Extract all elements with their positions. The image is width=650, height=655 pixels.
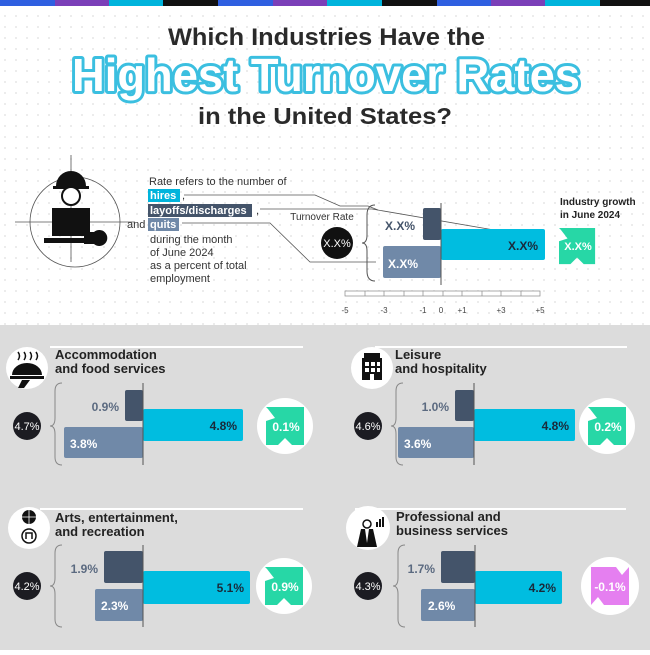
panel: arts, entertainment, and recreation: 5.1% bbox=[217, 581, 244, 595]
panel: professional and business services: 1.7% bbox=[408, 562, 435, 576]
axis ruler: +3 bbox=[496, 306, 506, 315]
legend text: hires bbox=[150, 190, 176, 202]
legend text: layoffs/discharges bbox=[150, 205, 247, 217]
panel: arts, entertainment, and recreation: 1.9% bbox=[71, 562, 98, 576]
title: Which Industries Have the bbox=[168, 24, 485, 51]
legend text: employment bbox=[150, 273, 210, 285]
panel: accommodation and food services: 0.1% bbox=[272, 420, 300, 434]
legend chart: X.X% bbox=[323, 238, 351, 250]
panel: arts, entertainment, and recreation: 0.9% bbox=[271, 580, 299, 594]
panel: accommodation and food services: Accommodation bbox=[55, 347, 157, 362]
legend chart bbox=[290, 197, 636, 285]
legend text: , bbox=[256, 205, 259, 217]
panel: accommodation and food services: 0.9% bbox=[92, 400, 119, 414]
legend icon: worker bbox=[15, 155, 135, 267]
panel: leisure and hospitality: 1.0% bbox=[422, 400, 449, 414]
panel: arts, entertainment, and recreation: and recreation bbox=[55, 524, 145, 539]
panel: leisure and hospitality bbox=[351, 347, 635, 465]
panel: arts, entertainment, and recreation: 2.3% bbox=[101, 599, 129, 613]
legend chart: X.X% bbox=[388, 257, 418, 271]
legend text: of June 2024 bbox=[150, 247, 214, 259]
panel: accommodation and food services: 4.8% bbox=[210, 419, 237, 433]
panel: leisure and hospitality: 0.2% bbox=[594, 420, 622, 434]
legend text: and bbox=[127, 219, 145, 231]
legend text: quits bbox=[150, 219, 176, 231]
panel: leisure and hospitality: 4.6% bbox=[355, 421, 381, 433]
panel: arts, entertainment, and recreation: Arts, entertainment, bbox=[55, 510, 178, 525]
panel: accommodation and food services: and food services bbox=[55, 361, 166, 376]
panel: accommodation and food services: 4.7% bbox=[14, 421, 40, 433]
axis ruler: -5 bbox=[341, 306, 349, 315]
panel: professional and business services: Professional and bbox=[396, 509, 501, 524]
legend chart: Turnover Rate bbox=[290, 212, 354, 223]
panel: leisure and hospitality: 3.6% bbox=[404, 437, 432, 451]
title: in the United States? bbox=[198, 103, 452, 129]
legend chart: X.X% bbox=[508, 239, 538, 253]
panel: leisure and hospitality: and hospitality bbox=[395, 361, 488, 376]
legend text: as a percent of total bbox=[150, 260, 247, 272]
panel: leisure and hospitality: 4.8% bbox=[542, 419, 569, 433]
panel: accommodation and food services: 3.8% bbox=[70, 437, 98, 451]
title: Highest Turnover Rates bbox=[72, 49, 580, 101]
legend chart: Industry growth bbox=[560, 197, 636, 208]
panel: professional and business services: 4.2% bbox=[529, 581, 556, 595]
gray data area bbox=[0, 325, 650, 650]
panel: accommodation and food services bbox=[6, 347, 313, 465]
legend text: during the month bbox=[150, 234, 233, 246]
axis ruler bbox=[341, 291, 545, 315]
legend chart: in June 2024 bbox=[560, 210, 620, 221]
panel: professional and business services bbox=[346, 506, 639, 627]
legend text: Rate refers to the number of bbox=[149, 176, 288, 188]
panel: arts, entertainment, and recreation: 4.2% bbox=[14, 581, 40, 593]
title bbox=[72, 24, 580, 129]
panel: professional and business services: 4.3% bbox=[355, 581, 381, 593]
legend text: , bbox=[182, 190, 185, 202]
panel: professional and business services: 2.6% bbox=[428, 599, 456, 613]
panel: leisure and hospitality: Leisure bbox=[395, 347, 441, 362]
legend chart: X.X% bbox=[385, 219, 415, 233]
axis ruler: 0 bbox=[439, 306, 444, 315]
panel: professional and business services: -0.1% bbox=[594, 580, 626, 594]
panel: arts, entertainment, and recreation bbox=[8, 507, 312, 627]
axis ruler: +1 bbox=[457, 306, 467, 315]
legend chart: X.X% bbox=[564, 241, 592, 253]
panel: professional and business services: business services bbox=[396, 523, 508, 538]
axis ruler: -1 bbox=[419, 306, 427, 315]
axis ruler: +5 bbox=[535, 306, 545, 315]
legend text bbox=[127, 176, 288, 285]
axis ruler: -3 bbox=[380, 306, 388, 315]
top color stripe bbox=[0, 0, 650, 6]
legend connector lines bbox=[182, 195, 500, 262]
